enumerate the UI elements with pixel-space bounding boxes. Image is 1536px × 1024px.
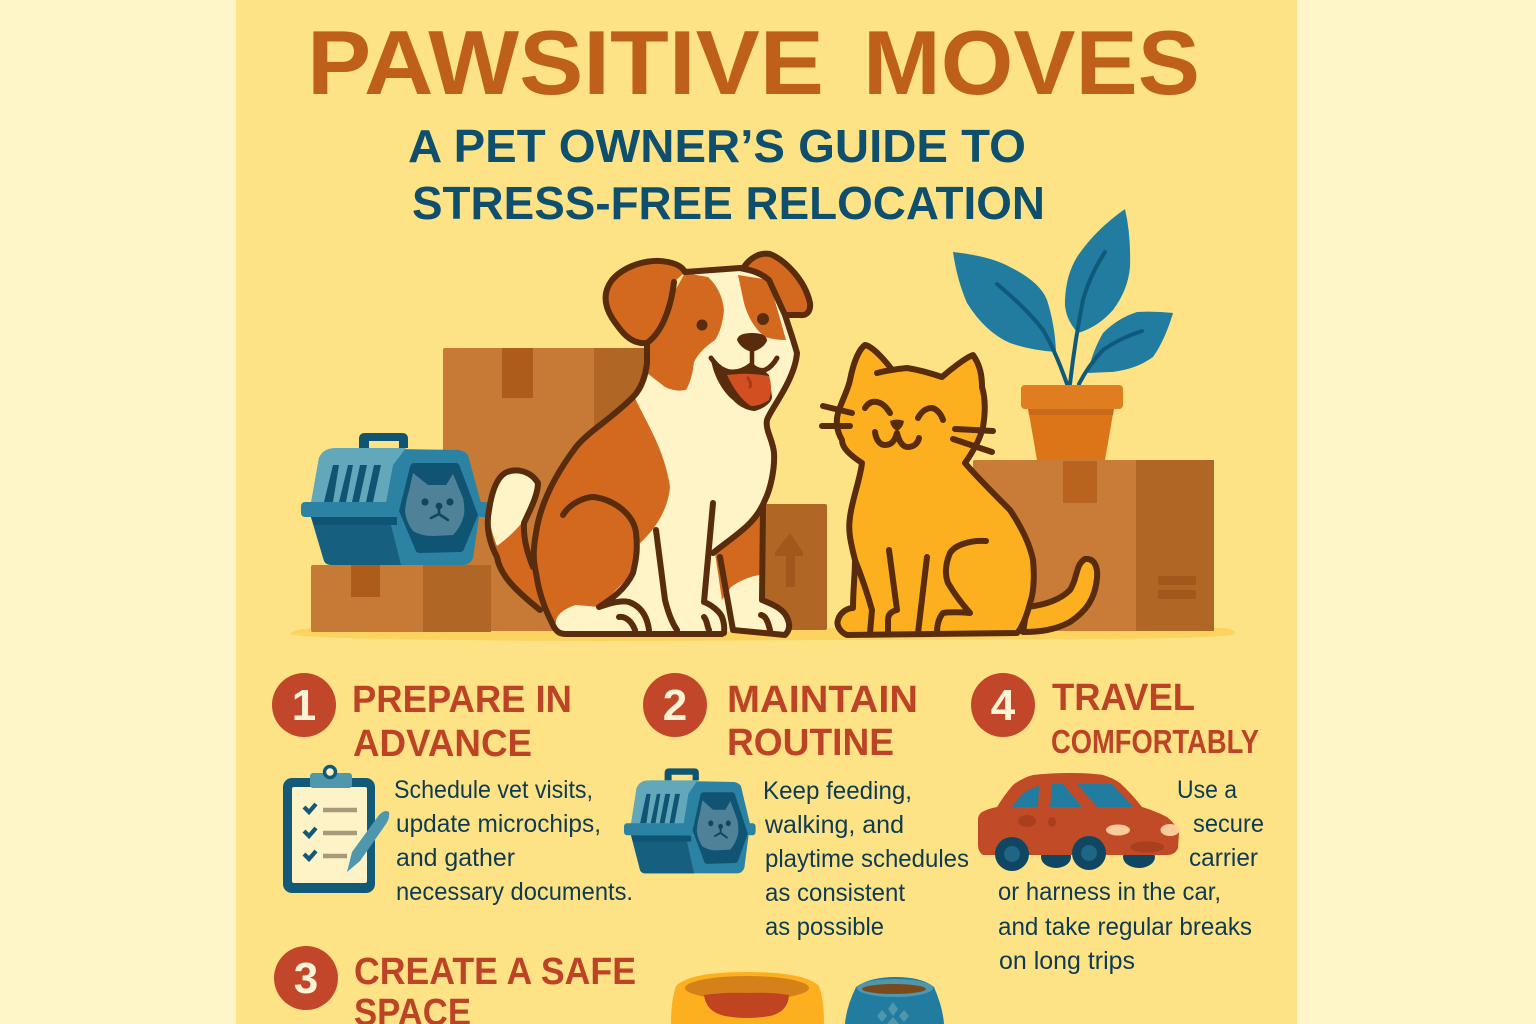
step 1 text: and gather: [396, 844, 515, 872]
flower pot: [1021, 385, 1123, 460]
step 2 text: Keep feeding,: [763, 777, 912, 805]
subtitle: A PET OWNER’S GUIDE TO: [408, 120, 1026, 172]
step 2 badge: 2: [663, 681, 687, 730]
icon: car: [978, 773, 1180, 871]
dog: [488, 254, 810, 635]
step 4 text: secure: [1193, 810, 1264, 838]
cat face: [822, 402, 993, 452]
step 4 text: or harness in the car,: [998, 878, 1221, 906]
dog body: [534, 268, 797, 635]
step 4 badge: [971, 673, 1035, 737]
step 2 heading: [727, 679, 918, 764]
dog face: [696, 313, 777, 411]
step 4 text: on long trips: [999, 947, 1135, 975]
step 4 heading: [1051, 677, 1259, 760]
hero illustration: [290, 209, 1235, 641]
icon: clipboard: [283, 766, 389, 893]
step 1 text: update microchips,: [396, 810, 601, 838]
step 1 text: necessary documents.: [396, 878, 633, 906]
icon: blue bowl: [845, 977, 944, 1024]
step 2 badge: [643, 673, 707, 737]
dog body patch: [534, 397, 670, 627]
title: MOVES: [863, 13, 1200, 114]
step 1: prepare in advance: [272, 673, 633, 906]
step 1 text: [394, 776, 633, 906]
moving box: right small with arrow: [740, 504, 827, 630]
step 4 text: carrier: [1189, 844, 1258, 872]
step 3: create a safe space: [274, 946, 944, 1024]
step 1 heading: PREPARE IN: [352, 679, 572, 721]
cat outline: [837, 345, 1034, 635]
cat: [822, 345, 1097, 635]
subtitle: [408, 120, 1045, 229]
plant: [953, 209, 1173, 460]
subtitle: STRESS-FREE RELOCATION: [412, 177, 1045, 229]
ground shadow: [290, 628, 1235, 641]
step 3 badge: 3: [294, 954, 318, 1003]
pet carrier: [301, 433, 489, 565]
step 2 heading: ROUTINE: [727, 722, 894, 764]
step 1 heading: [352, 679, 572, 765]
step 3 badge: [274, 946, 338, 1010]
moving box: large back: [443, 348, 653, 631]
step 2 text: walking, and: [764, 811, 904, 839]
step 4 heading: TRAVEL: [1052, 677, 1195, 719]
title: PAWSITIVE: [307, 13, 824, 114]
step 1 text: Schedule vet visits,: [394, 776, 593, 804]
step 1 badge: 1: [292, 681, 316, 730]
step 2 text: as consistent: [765, 879, 905, 907]
page background panel: [236, 0, 1297, 1024]
moving box: right large: [973, 460, 1214, 631]
cat body: [837, 345, 1034, 635]
icon: pet carrier: [624, 768, 756, 873]
step 2 heading: MAINTAIN: [727, 679, 918, 721]
step 4 text: and take regular breaks: [998, 913, 1252, 941]
step 3 heading: CREATE A SAFE: [354, 951, 636, 993]
icon: orange bowl: [671, 972, 824, 1024]
step 2 text: as possible: [765, 913, 884, 941]
dog outline: [685, 268, 797, 553]
step 4 badge: 4: [991, 681, 1016, 730]
dog head patch left: [647, 273, 724, 391]
step 2: maintain routine: [624, 673, 969, 941]
step 2 text: playtime schedules: [765, 845, 969, 873]
cat tail: [1023, 559, 1097, 632]
step 4 heading: COMFORTABLY: [1051, 723, 1259, 760]
step 1 heading: ADVANCE: [353, 723, 532, 765]
moving box: under carrier: [311, 565, 491, 632]
dog head patch right: [738, 275, 786, 340]
step 3 heading: [354, 951, 636, 1024]
step 4 text: Use a: [1177, 776, 1237, 804]
dog ears: [606, 254, 810, 343]
dog tail: [488, 470, 540, 610]
step 4 text: [998, 776, 1264, 975]
step 4: travel comfortably: [971, 673, 1264, 975]
step 2 text: [763, 777, 969, 941]
step 1 badge: [272, 673, 336, 737]
dog leg patch: [715, 510, 761, 600]
